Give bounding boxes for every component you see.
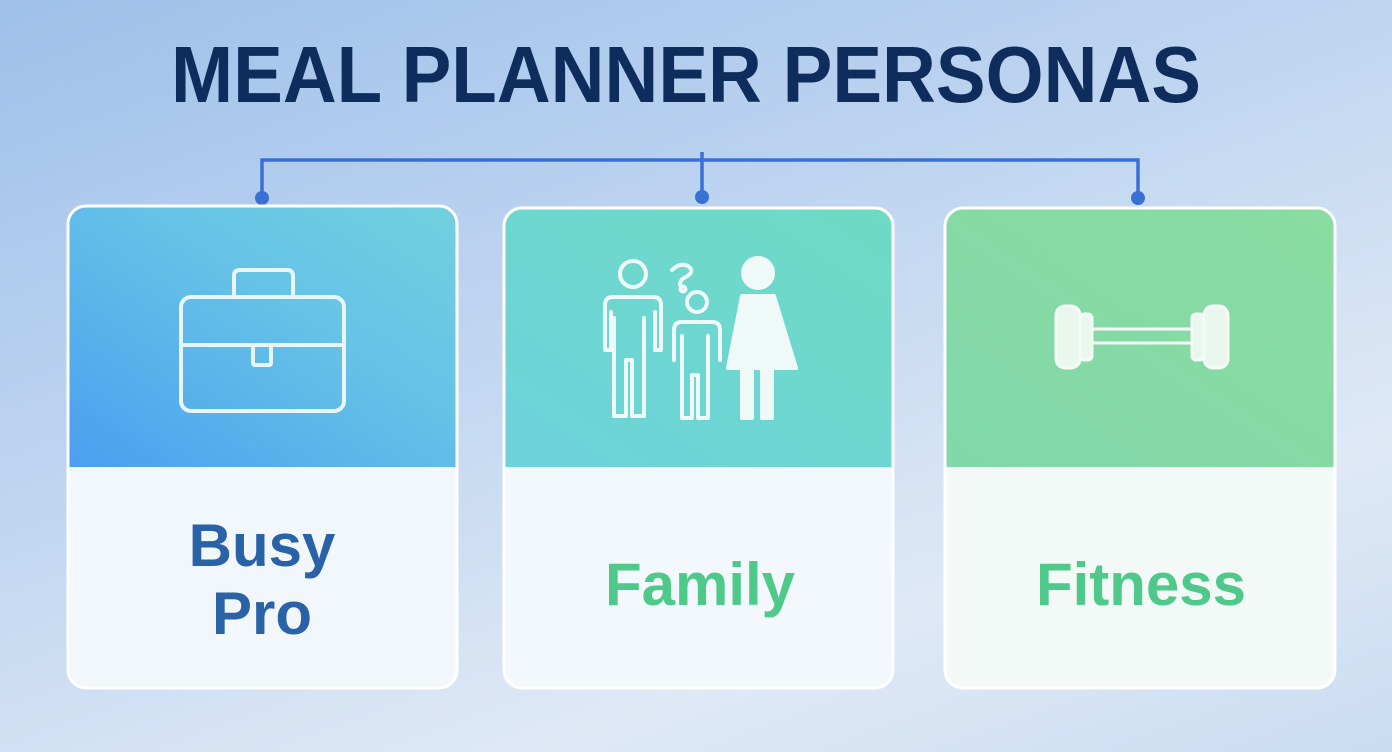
- icon: briefcase: [181, 270, 344, 411]
- icon: family: [605, 258, 796, 418]
- panel: busy pro: [68, 206, 457, 688]
- panel: family: [504, 208, 893, 688]
- label: family: Family: [605, 551, 796, 618]
- label: busy pro: Busy: [189, 512, 336, 579]
- connector lines: [255, 152, 1145, 205]
- panel: busy pro: Pro: [212, 580, 312, 647]
- icon: dumbbell: [1056, 306, 1228, 368]
- title: MEAL PLANNER PERSONAS: [171, 30, 1201, 119]
- panel: fitness: [945, 208, 1335, 688]
- label: fitness: Fitness: [1036, 551, 1246, 618]
